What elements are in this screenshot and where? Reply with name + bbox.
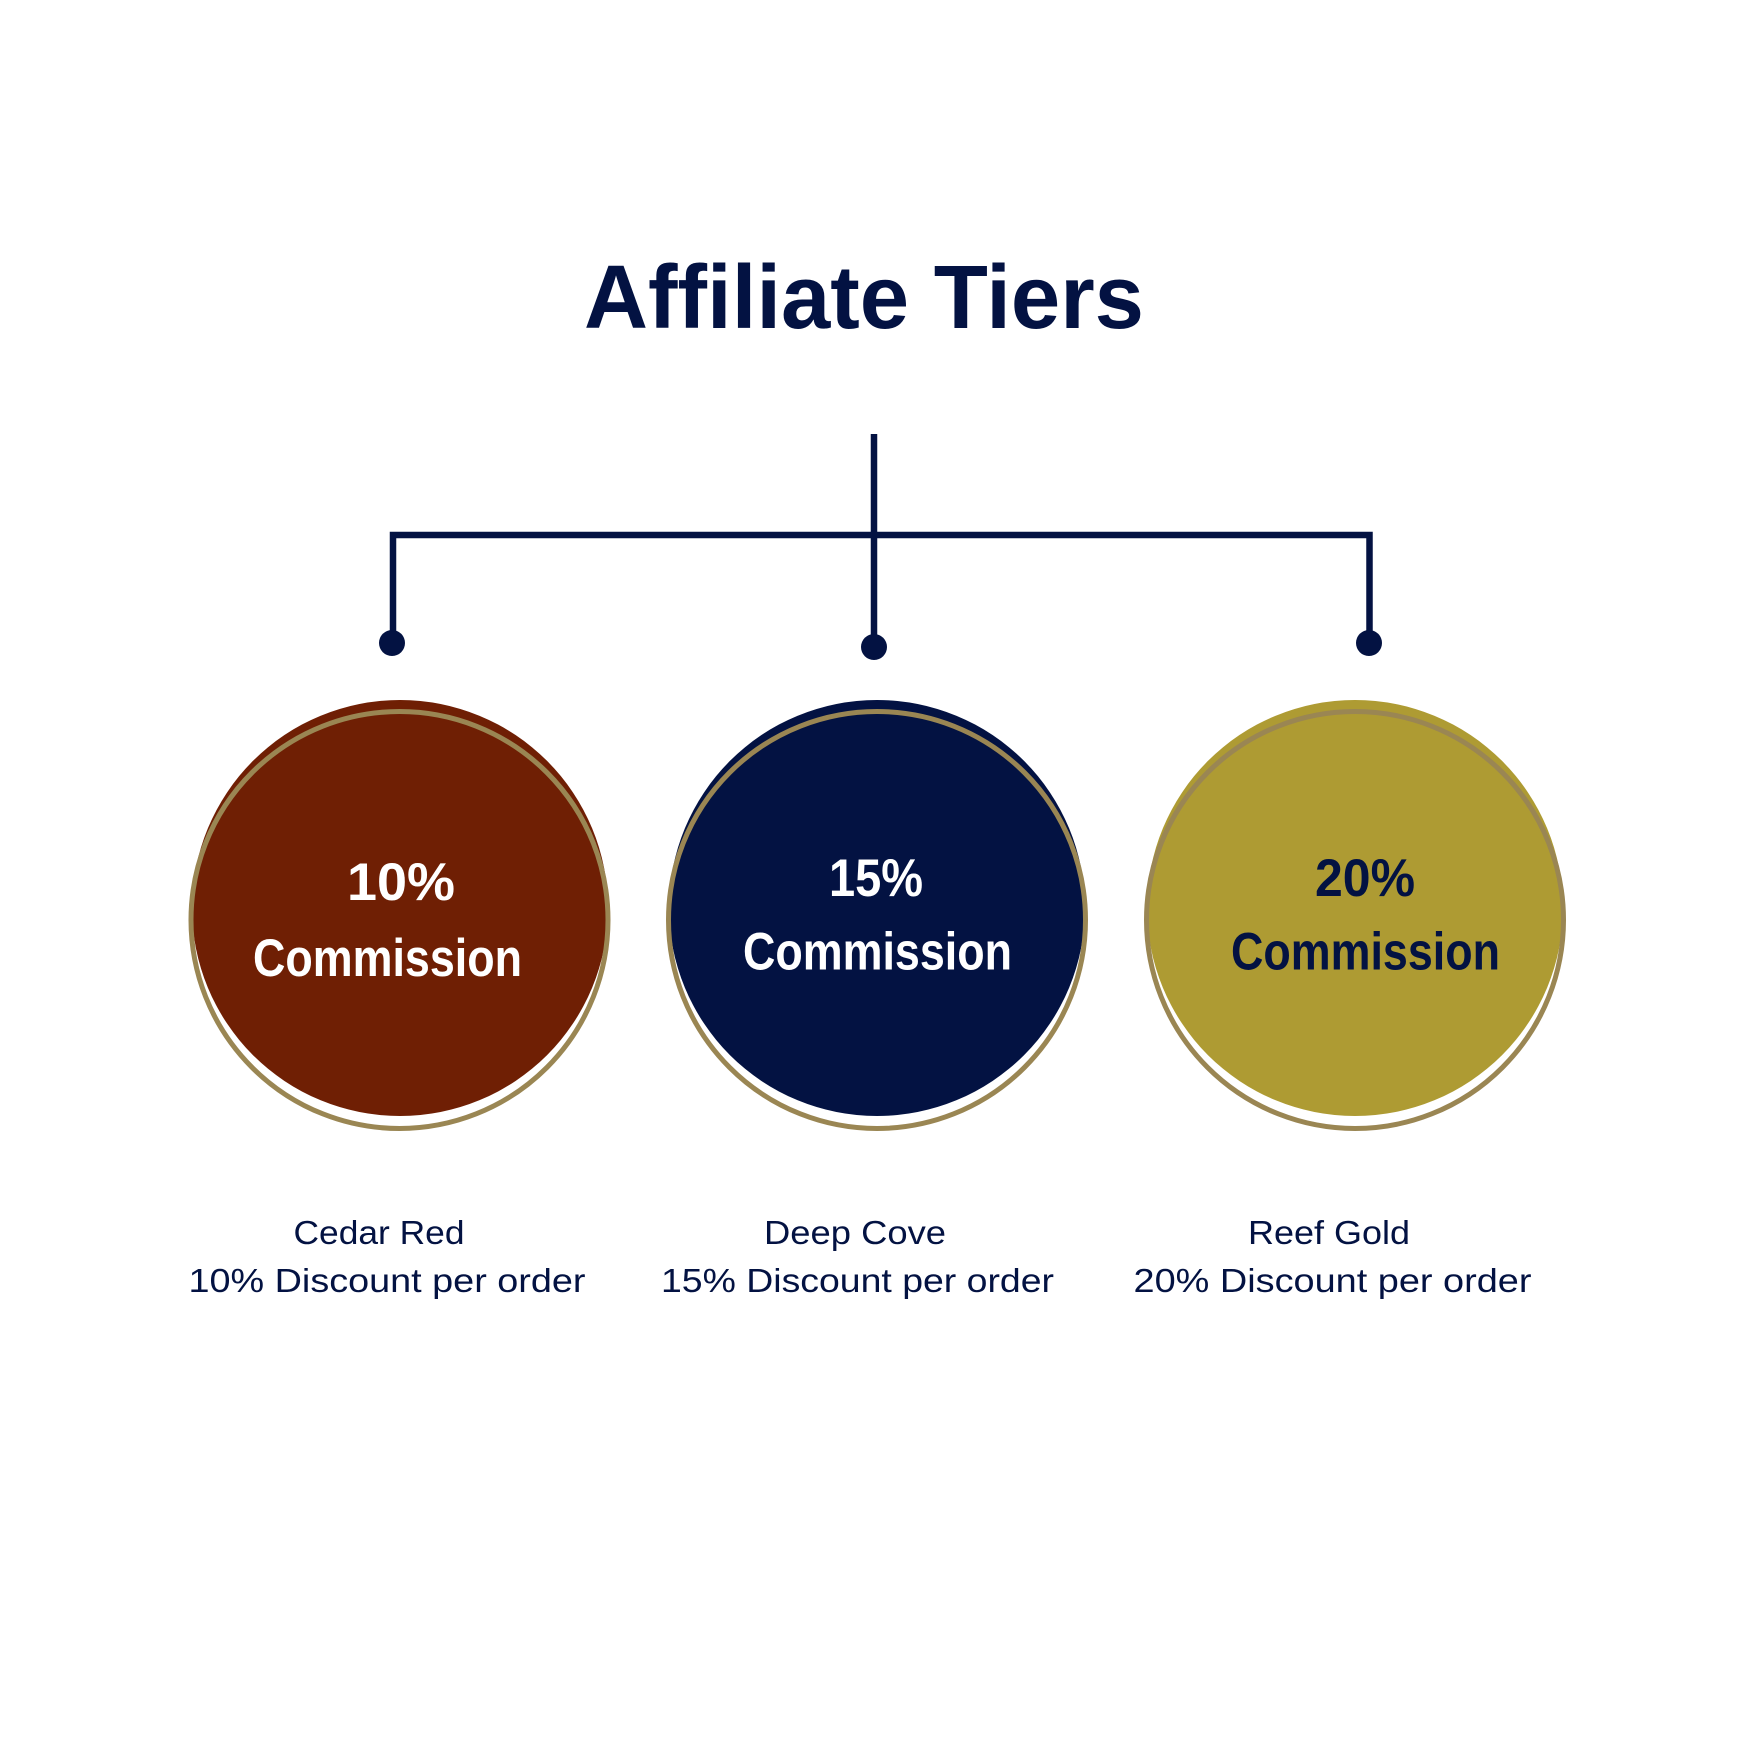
commission text: 15%: Commission [743, 922, 1012, 982]
connector dot: left [379, 630, 405, 656]
connector dot: center [861, 634, 887, 660]
title: Affiliate Tiers [584, 248, 1144, 348]
panel: 15% tier circle [668, 700, 1086, 1128]
commission text: 10%: 10% [347, 853, 455, 912]
commission text: 10%: Commission [253, 929, 522, 988]
panel: 10% tier circle [191, 700, 608, 1128]
text block: Cedar Red [188, 1214, 586, 1299]
text block: Deep Cove [661, 1214, 1054, 1299]
text block: Reef Gold [1134, 1214, 1532, 1299]
text block: Deep Cove: 15% Discount per order [661, 1262, 1054, 1299]
connector tree [379, 434, 1382, 660]
text block: Reef Gold: Reef Gold [1248, 1214, 1410, 1251]
text block: Cedar Red: Cedar Red [294, 1214, 464, 1251]
text block: Deep Cove: Deep Cove [764, 1214, 946, 1251]
commission text: 20% [1231, 849, 1500, 982]
commission text: 20%: 20% [1315, 849, 1415, 908]
connector dot: right [1356, 630, 1382, 656]
commission text: 10% [253, 853, 522, 988]
commission text: 20%: Commission [1231, 922, 1500, 982]
commission text: 15%: 15% [829, 849, 923, 908]
panel: 20% tier circle [1146, 700, 1564, 1128]
text block: Reef Gold: 20% Discount per order [1134, 1262, 1532, 1299]
text block: Cedar Red: 10% Discount per order [188, 1262, 586, 1299]
commission text: 15% [743, 849, 1012, 982]
